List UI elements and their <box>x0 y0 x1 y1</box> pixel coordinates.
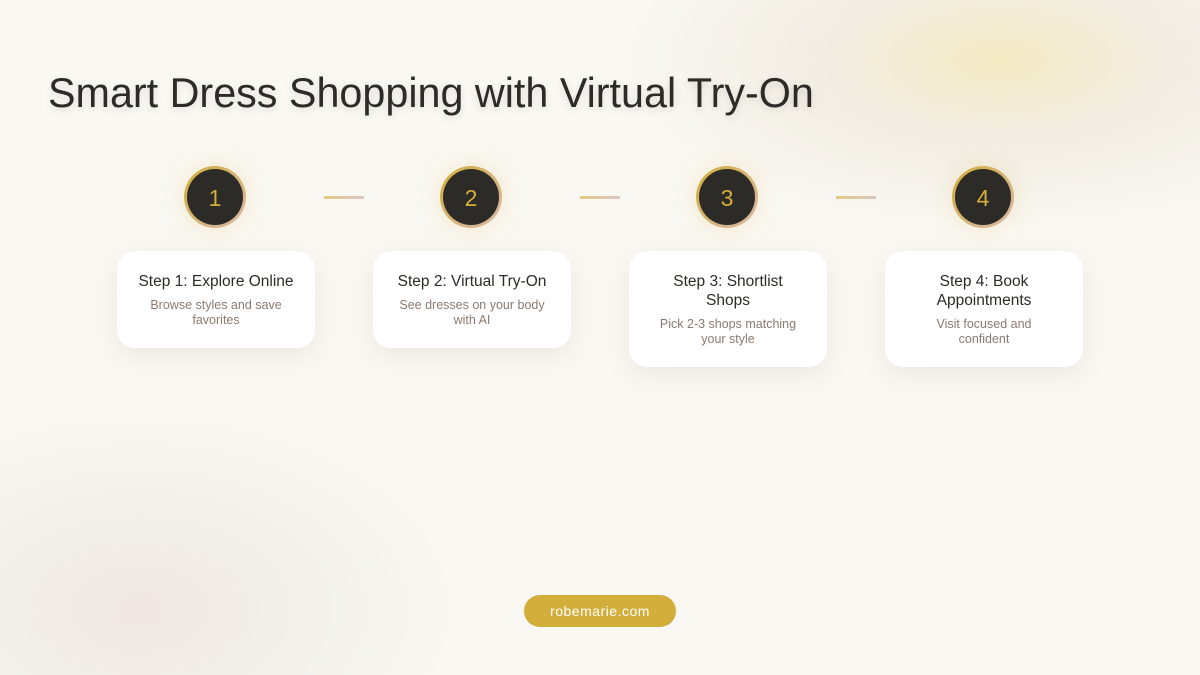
title: Smart Dress Shopping with Virtual Try-On <box>48 70 814 116</box>
card: step 2: See dresses on your body with AI <box>399 298 545 327</box>
card: step 4 <box>885 251 1083 367</box>
step 4 number <box>952 166 1014 228</box>
card: step 3: Step 3: Shortlist <box>673 273 783 290</box>
step 3 number <box>696 166 758 228</box>
card: step 4: Visit focused and <box>936 317 1031 331</box>
step 1 number: 1 <box>209 184 221 210</box>
footer pill <box>524 595 676 627</box>
card: step 3: Pick 2-3 shops matching <box>660 317 796 331</box>
card: step 3: your style <box>701 332 755 346</box>
step 2 number <box>440 166 502 228</box>
card: step 2: Step 2: Virtual Try-On <box>398 273 546 290</box>
footer pill: robemarie.com <box>550 603 650 619</box>
step 2 number: 2 <box>465 184 477 210</box>
step 4 number: 4 <box>977 184 989 210</box>
card: step 4: confident <box>959 332 1009 346</box>
connector 1 <box>324 196 364 199</box>
card: step 4: Appointments <box>937 292 1031 309</box>
card: step 1: Browse styles and save favorites <box>150 298 282 327</box>
card: step 1: Step 1: Explore Online <box>138 273 294 290</box>
card: step 4: Step 4: Book <box>940 273 1028 290</box>
step 3 number: 3 <box>721 184 733 210</box>
connector 2 <box>580 196 620 199</box>
step 1 number <box>184 166 246 228</box>
card: step 3: Shops <box>706 292 750 309</box>
card: step 1 <box>117 251 315 348</box>
card: step 2 <box>373 251 571 348</box>
connector 3 <box>836 196 876 199</box>
card: step 3 <box>629 251 827 367</box>
